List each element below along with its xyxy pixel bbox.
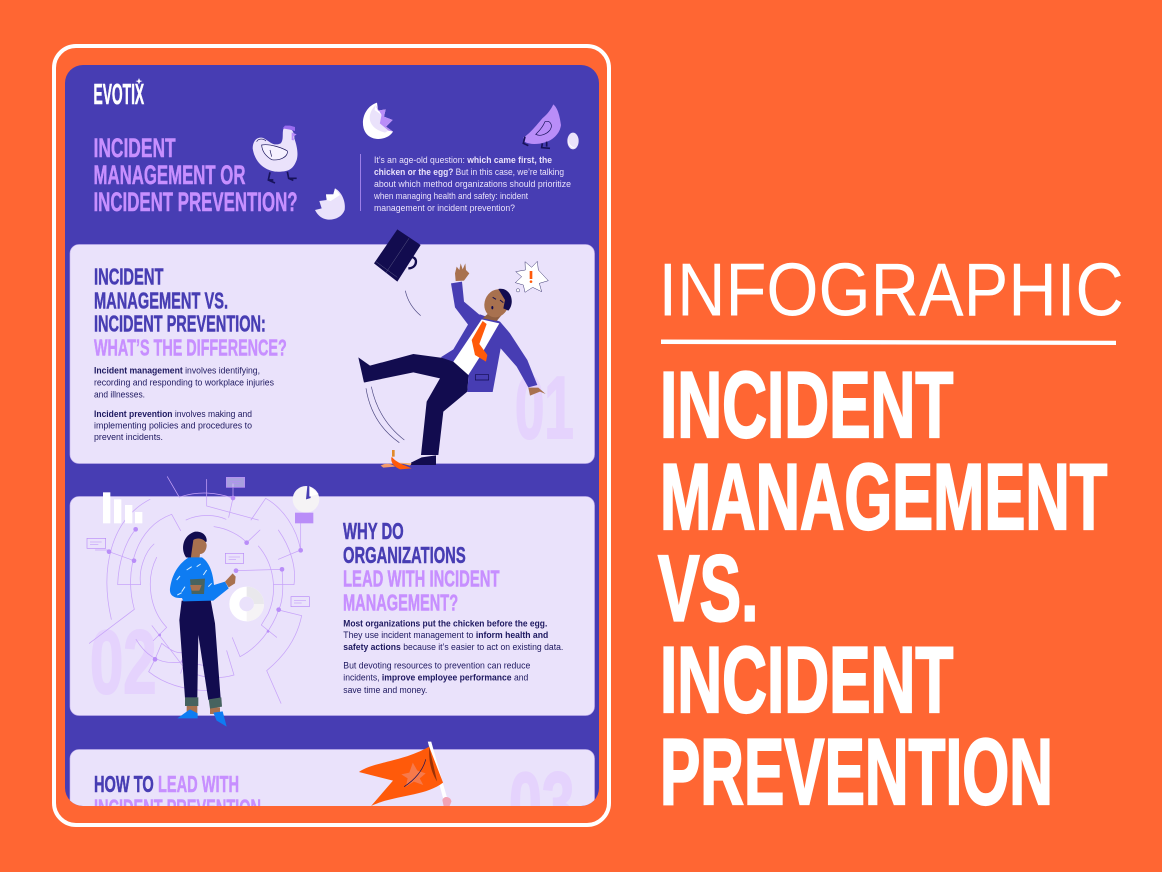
logo: Evotix: EVOTIX bbox=[94, 79, 144, 110]
icon: orange flag bbox=[359, 742, 451, 808]
main title: INCIDENT bbox=[660, 352, 953, 457]
heading: what's the difference: INCIDENT bbox=[94, 266, 164, 291]
main title: PREVENTION bbox=[660, 718, 1053, 824]
hands bbox=[225, 573, 236, 587]
icon: bar chart bbox=[103, 492, 142, 523]
text: definitions: prevent incidents. bbox=[94, 432, 163, 442]
icon: white hen bbox=[253, 126, 297, 183]
intro text bbox=[373, 155, 571, 213]
trousers bbox=[179, 600, 221, 700]
infographic panel bbox=[65, 65, 599, 855]
panel: section 03 bbox=[70, 750, 594, 850]
head bbox=[482, 288, 512, 321]
icon: purple hen and egg bbox=[523, 104, 579, 149]
icon: upper egg shell bbox=[363, 103, 393, 139]
message boxes bbox=[87, 477, 309, 607]
rule bbox=[661, 340, 1116, 345]
woman figure bbox=[170, 532, 236, 727]
heading: why do organizations lead bbox=[343, 519, 500, 616]
heading: how to lead with prevention: INCIDENT PREVENTION bbox=[94, 796, 261, 821]
text: why organizations lead with management bbox=[343, 618, 563, 695]
heading: why do organizations lead: WHY DO bbox=[343, 519, 404, 545]
shoes bbox=[358, 357, 436, 465]
icon: exclamation burst bbox=[515, 261, 548, 292]
icon: banana peel bbox=[381, 450, 412, 469]
heading: how to lead with prevention bbox=[94, 773, 261, 821]
heading: what's the difference bbox=[94, 266, 287, 362]
panel: section 02 bbox=[70, 496, 594, 716]
text: why organizations lead with management: But devoting resources to prevention can reduce bbox=[343, 661, 530, 671]
heading: incident management or prevention bbox=[94, 138, 297, 212]
sweater bbox=[170, 557, 229, 601]
text: definitions: Incident management involves identifying, bbox=[94, 366, 260, 376]
text: why organizations lead with management: Most organizations put the chicken before the egg. bbox=[343, 618, 547, 628]
text: why organizations lead with management: incidents, improve employee performance and bbox=[343, 673, 528, 683]
icon: donut chart bbox=[234, 592, 259, 616]
main title bbox=[658, 352, 1107, 824]
intro text: chicken or the egg? But in this case, we’re talking bbox=[374, 167, 564, 177]
intro text: management or incident prevention? bbox=[374, 203, 515, 213]
main title: INCIDENT bbox=[660, 627, 953, 732]
ankles bbox=[186, 706, 198, 714]
icon: briefcase bbox=[374, 229, 421, 282]
heading: incident management or prevention: INCIDENT bbox=[94, 132, 176, 163]
heading: incident management or prevention: INCIDENT PREVENTION? bbox=[94, 187, 298, 217]
text: why organizations lead with management: save time and money. bbox=[343, 685, 427, 695]
heading: why do organizations lead: ORGANIZATIONS bbox=[343, 544, 466, 569]
intro text: It’s an age-old question: which came first, the bbox=[374, 155, 552, 165]
illustration: man slipping on banana bbox=[358, 229, 548, 471]
label: INFOGRAPHIC: INFOGRAPHIC bbox=[658, 249, 1124, 333]
tablet bbox=[190, 579, 205, 594]
number 02: 02 bbox=[90, 613, 157, 713]
heading: why do organizations lead: MANAGEMENT? bbox=[343, 591, 458, 616]
hair bbox=[183, 532, 207, 558]
text: definitions: and illnesses. bbox=[94, 390, 145, 400]
motion lines bbox=[366, 291, 421, 443]
intro text: when managing health and safety: incident bbox=[373, 191, 528, 201]
text: definitions: implementing policies and procedures to bbox=[94, 420, 252, 430]
heading: what's the difference: INCIDENT PREVENTION: bbox=[94, 313, 266, 338]
tie bbox=[472, 321, 487, 362]
intro text: about which method organizations should prioritize bbox=[374, 179, 571, 189]
text: definitions: recording and responding to workplace injuries bbox=[94, 378, 274, 388]
heading: incident management or prevention: MANAGEMENT OR bbox=[94, 160, 245, 190]
text: why organizations lead with management: They use incident management to inform health and bbox=[343, 630, 548, 640]
heading: why do organizations lead: LEAD WITH INCIDENT bbox=[343, 566, 500, 592]
hand on ground bbox=[528, 388, 546, 396]
number 03: 03 bbox=[509, 755, 575, 855]
icon: pie chart bbox=[293, 486, 319, 523]
trousers bbox=[365, 354, 469, 455]
face bbox=[191, 539, 207, 559]
illustration: woman and data network bbox=[87, 477, 319, 727]
text: definitions: Incident prevention involves making and bbox=[94, 409, 252, 419]
main title: VS. bbox=[658, 536, 758, 641]
jacket bbox=[441, 314, 537, 392]
main title: MANAGEMENT bbox=[660, 444, 1107, 549]
text: why organizations lead with management: safety actions because it’s easier to act on existing data. bbox=[343, 642, 563, 652]
shirt bbox=[453, 319, 499, 375]
text: definitions bbox=[94, 366, 274, 442]
number 01: 01 bbox=[515, 359, 574, 457]
panel: section 01 bbox=[70, 244, 594, 464]
divider bbox=[360, 154, 361, 211]
heading: what's the difference: WHAT’S THE DIFFERENCE? bbox=[94, 337, 287, 362]
heading: how to lead with prevention: LEAD WITH bbox=[158, 773, 239, 798]
heading: what's the difference: MANAGEMENT VS. bbox=[94, 289, 228, 314]
raised arm and hand bbox=[451, 263, 482, 325]
icon: lower egg shell bbox=[315, 188, 345, 220]
heading: how to lead with prevention: HOW TO bbox=[94, 773, 154, 798]
shoes bbox=[177, 709, 198, 718]
network lines bbox=[89, 477, 303, 703]
infographic preview frame bbox=[54, 46, 609, 855]
